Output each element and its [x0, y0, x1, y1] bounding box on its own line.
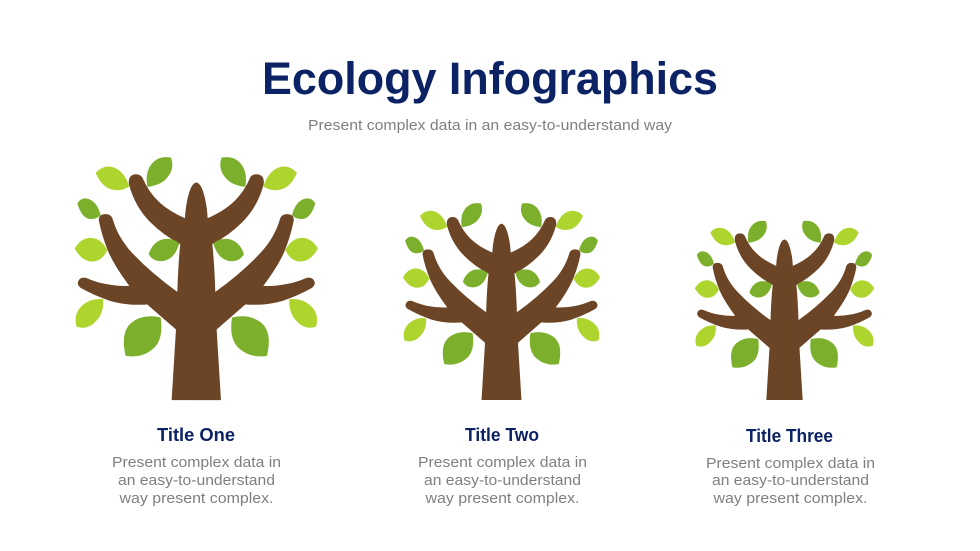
body: title two: Present complex data in [418, 454, 587, 471]
heading: title two: Title Two [465, 425, 539, 445]
tree one [75, 157, 318, 400]
body: title one: way present complex. [118, 490, 273, 507]
tree three left leaves [695, 221, 772, 368]
heading: title one: Title One [157, 425, 235, 445]
body: title three [706, 455, 875, 507]
body: title two [418, 454, 587, 507]
body: title two: an easy-to-understand [424, 472, 581, 489]
title: Ecology Infographics [262, 53, 718, 104]
tree two right leaves [515, 203, 600, 365]
tree one right leaves [213, 157, 318, 356]
body: title one: Present complex data in [112, 454, 281, 471]
tree three trunk and branches [697, 233, 872, 400]
subtitle: Present complex data in an easy-to-understand way [308, 117, 673, 134]
panel: title one text [112, 425, 281, 507]
panel: title three text [706, 426, 875, 507]
panel: title two text [418, 425, 587, 507]
body: title three: Present complex data in [706, 455, 875, 472]
tree three [695, 221, 874, 400]
body: title one: an easy-to-understand [118, 472, 275, 489]
tree one trunk and branches [78, 174, 315, 400]
body: title three: way present complex. [712, 490, 868, 507]
tree two trunk and branches [406, 217, 597, 400]
body: title one [112, 454, 281, 507]
tree two left leaves [403, 203, 488, 365]
tree three right leaves [797, 221, 874, 368]
tree two [403, 203, 600, 400]
body: title three: an easy-to-understand [712, 472, 869, 489]
body: title two: way present complex. [424, 490, 580, 507]
tree one left leaves [75, 157, 179, 356]
heading: title three: Title Three [746, 426, 833, 446]
